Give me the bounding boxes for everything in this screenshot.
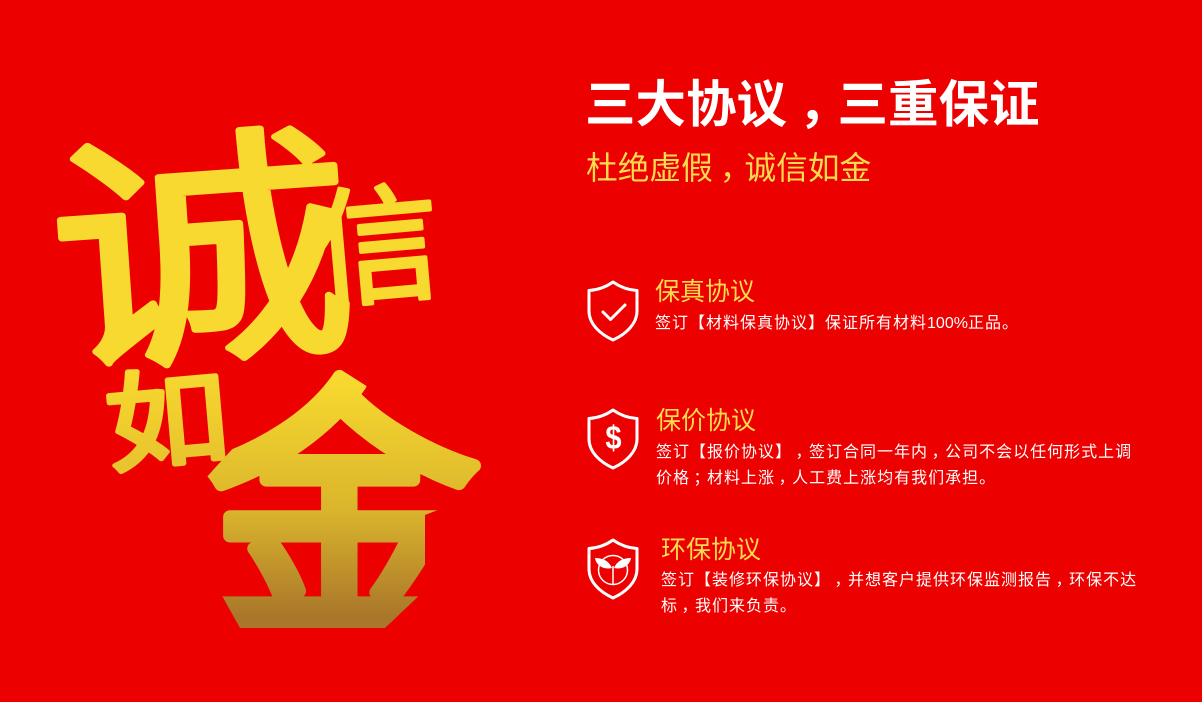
title: 三大协议，三重保证 bbox=[585, 76, 1040, 133]
text: 保价协议 description: 签订【报价协议】，签订合同一年内，公司不会以任何形式上调 bbox=[656, 444, 1132, 461]
calligraphy glyph: 信: 信 bbox=[303, 139, 447, 335]
calligraphy glyph: 如: 如 bbox=[98, 330, 234, 495]
text: 保价协议 description bbox=[656, 443, 1132, 487]
panel: 保价协议 bbox=[588, 407, 1132, 487]
calligraphy glyph: 金: 金 bbox=[198, 293, 482, 687]
icon: shield with dollar sign bbox=[588, 408, 638, 470]
heading: 保价协议: 保价协议 bbox=[656, 407, 756, 435]
icon: shield with check mark bbox=[588, 280, 638, 342]
subtitle: 杜绝虚假，诚信如金 bbox=[586, 150, 871, 186]
text: 环保协议 description: 标，我们来负责。 bbox=[661, 598, 797, 615]
heading: 环保协议: 环保协议 bbox=[661, 536, 761, 564]
calligraphy glyph: 诚: 诚 bbox=[38, 44, 362, 424]
heading: 保真协议: 保真协议 bbox=[655, 278, 755, 306]
icon: shield with sprout bbox=[588, 538, 638, 600]
text: 环保协议 description bbox=[661, 571, 1137, 615]
calligraphy: 诚信如金 bbox=[38, 44, 481, 628]
panel: 保真协议 bbox=[588, 278, 1019, 342]
text: 保价协议 description: 价格；材料上涨，人工费上涨均有我们承担。 bbox=[656, 470, 996, 487]
panel: 环保协议 bbox=[588, 536, 1137, 615]
text: 环保协议 description: 签订【装修环保协议】，并想客户提供环保监测报告，环保不达 bbox=[661, 572, 1137, 589]
icon: shield with dollar sign: $ bbox=[605, 419, 622, 456]
text: 保真协议 description: 签订【材料保真协议】保证所有材料100%正品。 bbox=[655, 315, 1019, 332]
